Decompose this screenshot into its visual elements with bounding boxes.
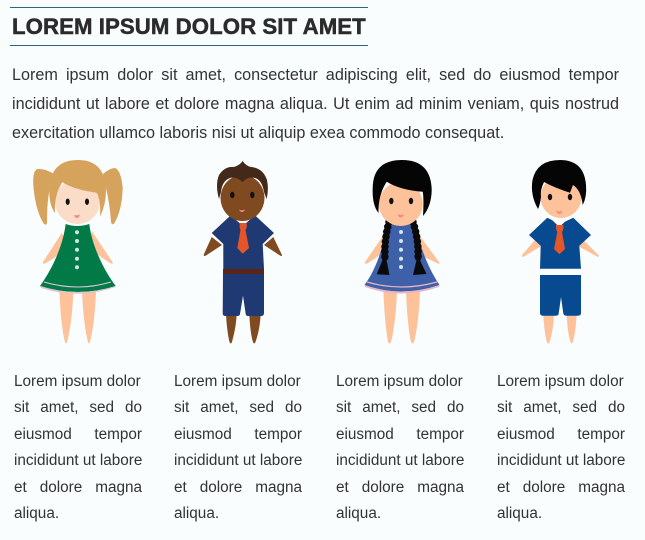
text column 2: eiusmod tempor <box>174 426 302 443</box>
text column 3: aliqua. <box>336 505 381 522</box>
text column 3: Lorem ipsum dolor <box>336 373 463 390</box>
text column 1: aliqua. <box>14 505 59 522</box>
title: LOREM IPSUM DOLOR SIT AMET <box>12 14 366 39</box>
text column 4: et dolore magna <box>497 479 625 496</box>
text column 2 <box>174 373 302 522</box>
text column 3: incididunt ut labore <box>336 452 464 469</box>
icon: boy in navy uniform <box>204 161 282 344</box>
text column 4 <box>497 373 625 522</box>
text column 3: eiusmod tempor <box>336 426 464 443</box>
intro paragraph <box>12 66 619 142</box>
text column 4: Lorem ipsum dolor <box>497 373 624 390</box>
icon: boy in blue uniform <box>522 160 599 344</box>
text column 1: et dolore magna <box>14 479 142 496</box>
text column 2: Lorem ipsum dolor <box>174 373 301 390</box>
text column 2: et dolore magna <box>174 479 302 496</box>
text column 1: Lorem ipsum dolor <box>14 373 141 390</box>
text column 2: sit amet, sed do <box>174 399 302 416</box>
text column 4: incididunt ut labore <box>497 452 625 469</box>
text column 3: et dolore magna <box>336 479 464 496</box>
text column 1: incididunt ut labore <box>14 452 142 469</box>
text column 2: aliqua. <box>174 505 219 522</box>
text column 4: sit amet, sed do <box>497 399 625 416</box>
text column 4: eiusmod tempor <box>497 426 625 443</box>
text column 1 <box>14 373 142 522</box>
text column 3 <box>336 373 464 522</box>
text column 4: aliqua. <box>497 505 542 522</box>
text column 1: eiusmod tempor <box>14 426 142 443</box>
intro paragraph: exercitation ullamco laboris nisi ut aliquip exea commodo consequat. <box>12 124 504 142</box>
text column 3: sit amet, sed do <box>336 399 464 416</box>
text column 2: incididunt ut labore <box>174 452 302 469</box>
intro paragraph: Lorem ipsum dolor sit amet, consectetur adipiscing elit, sed do eiusmod tempor <box>12 66 619 84</box>
icon: girl in green dress <box>33 160 123 344</box>
text column 1: sit amet, sed do <box>14 399 142 416</box>
icon: girl in blue dress with braids <box>364 160 440 344</box>
intro paragraph: incididunt ut labore et dolore magna aliqua. Ut enim ad minim veniam, quis nostrud <box>12 95 619 113</box>
